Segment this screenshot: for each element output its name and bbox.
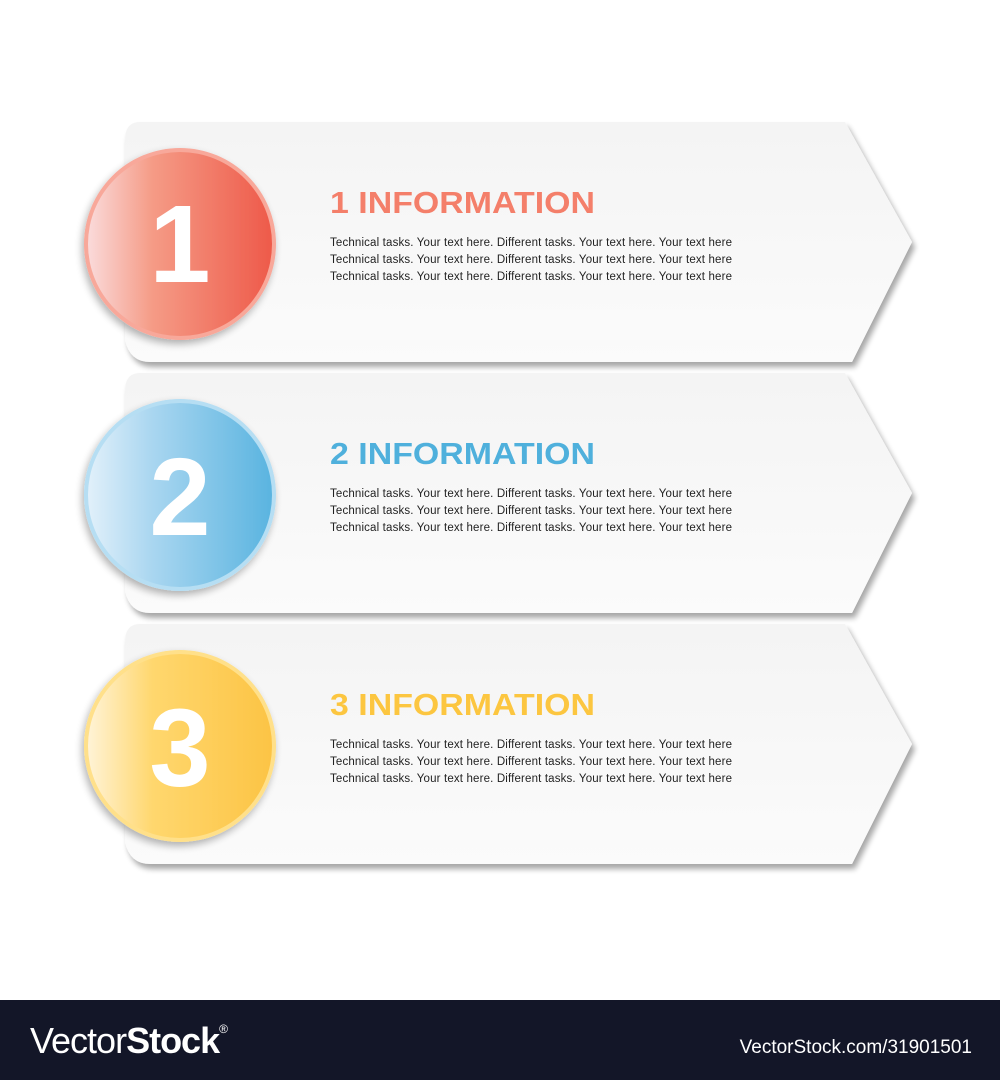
footer bar	[0, 1000, 1000, 1080]
text block: Technical tasks. Your text here. Different tasks. Your text here. Your text here	[330, 522, 732, 534]
url: VectorStock.com/31901501	[740, 1037, 972, 1058]
text block: Technical tasks. Your text here. Different tasks. Your text here. Your text here	[330, 739, 732, 751]
panel: 2 information	[84, 373, 912, 613]
text block	[330, 237, 732, 283]
icon: red circle 1: 1	[149, 183, 211, 306]
panel: 1 information	[84, 122, 912, 362]
logo: ®	[219, 1022, 228, 1036]
heading: 3 INFORMATION	[330, 687, 595, 722]
heading: 2 INFORMATION	[330, 436, 595, 471]
text block: Technical tasks. Your text here. Different tasks. Your text here. Your text here	[330, 505, 732, 517]
icon: blue circle 2: 2	[149, 436, 211, 559]
icon: yellow circle 3: 3	[149, 687, 211, 810]
text block	[330, 488, 732, 534]
text block	[330, 739, 732, 785]
icon: yellow circle 3	[84, 650, 276, 842]
panel: 3 information	[84, 624, 912, 864]
text block: Technical tasks. Your text here. Different tasks. Your text here. Your text here	[330, 488, 732, 500]
text block: Technical tasks. Your text here. Different tasks. Your text here. Your text here	[330, 773, 732, 785]
heading: 1 INFORMATION	[330, 185, 595, 220]
text block: Technical tasks. Your text here. Different tasks. Your text here. Your text here	[330, 271, 732, 283]
text block: Technical tasks. Your text here. Different tasks. Your text here. Your text here	[330, 254, 732, 266]
logo: VectorStock	[30, 1020, 219, 1061]
text block: Technical tasks. Your text here. Different tasks. Your text here. Your text here	[330, 756, 732, 768]
text block: Technical tasks. Your text here. Different tasks. Your text here. Your text here	[330, 237, 732, 249]
icon: blue circle 2	[84, 399, 276, 591]
icon: red circle 1	[84, 148, 276, 340]
